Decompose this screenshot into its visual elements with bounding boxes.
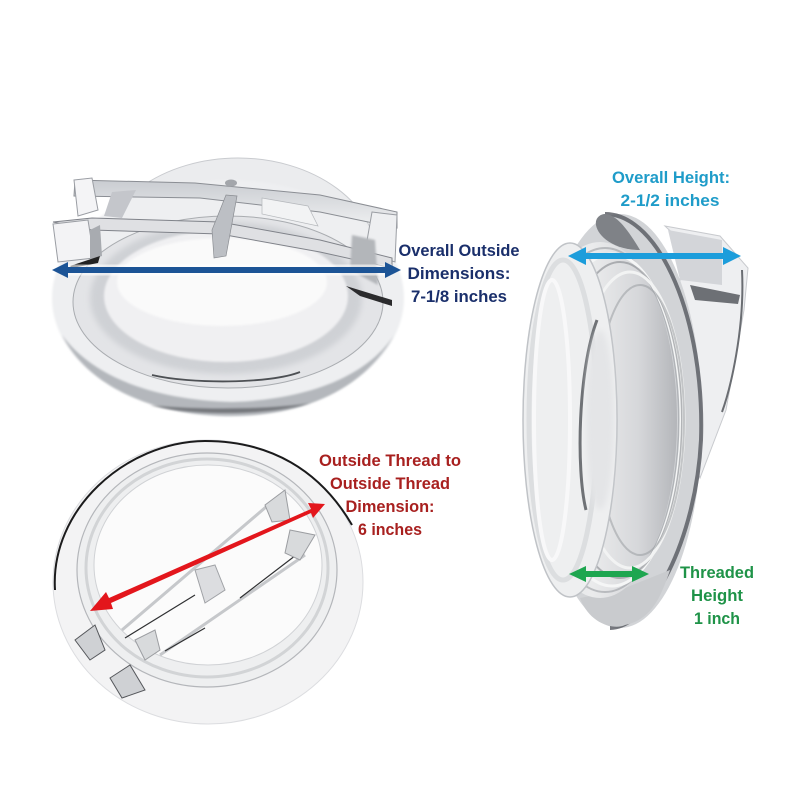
label: threaded height: 1 inch xyxy=(694,609,740,628)
label: thread to thread dimension: 6 inches xyxy=(358,520,422,539)
flange xyxy=(538,214,702,628)
arrow: overall height xyxy=(568,247,741,265)
label: overall outside dimensions: 7-1/8 inches xyxy=(411,287,507,306)
lid handle, front bar xyxy=(53,218,392,268)
photo: bottom lid, underside view xyxy=(53,440,363,724)
label: overall height xyxy=(612,168,730,210)
label: overall height: Overall Height: xyxy=(612,168,730,187)
photo: threaded ring, side view xyxy=(523,214,748,628)
bottom lid handle bars xyxy=(122,495,305,655)
label: overall outside dimensions xyxy=(398,241,520,306)
lid handle, rear bar xyxy=(74,180,397,228)
bottom lid thread ring xyxy=(77,453,337,687)
label: thread to thread dimension: Outside Thread to xyxy=(319,451,461,470)
bottom lid outer disc xyxy=(53,440,363,724)
label: overall outside dimensions: Overall Outside xyxy=(398,241,520,260)
lid dome xyxy=(98,158,378,366)
handle behind ring xyxy=(665,226,748,478)
label: threaded height: Threaded xyxy=(680,563,754,582)
bottom lid tabs xyxy=(75,625,145,698)
lid lower rim shading xyxy=(62,335,394,416)
lid outer body xyxy=(52,180,404,416)
arrow: threaded height xyxy=(569,566,649,582)
lid handle latches xyxy=(70,256,100,268)
label: thread to thread dimension: Dimension: xyxy=(346,497,434,516)
label: overall height: 2-1/2 inches xyxy=(620,191,720,210)
thread body xyxy=(523,242,677,598)
bottom lid inner floor xyxy=(94,465,322,665)
arrow: thread to thread dimension xyxy=(90,503,325,611)
ring opening xyxy=(523,243,617,597)
lid bowl xyxy=(73,216,383,388)
label: thread to thread dimension xyxy=(319,451,461,539)
label: overall outside dimensions: Dimensions: xyxy=(408,264,510,283)
photo: top lid, side view xyxy=(52,158,404,416)
label: threaded height xyxy=(680,563,754,628)
label: threaded height: Height xyxy=(691,586,743,605)
label: thread to thread dimension: Outside Thread xyxy=(330,474,450,493)
arrow: overall outside dimensions xyxy=(52,262,401,278)
